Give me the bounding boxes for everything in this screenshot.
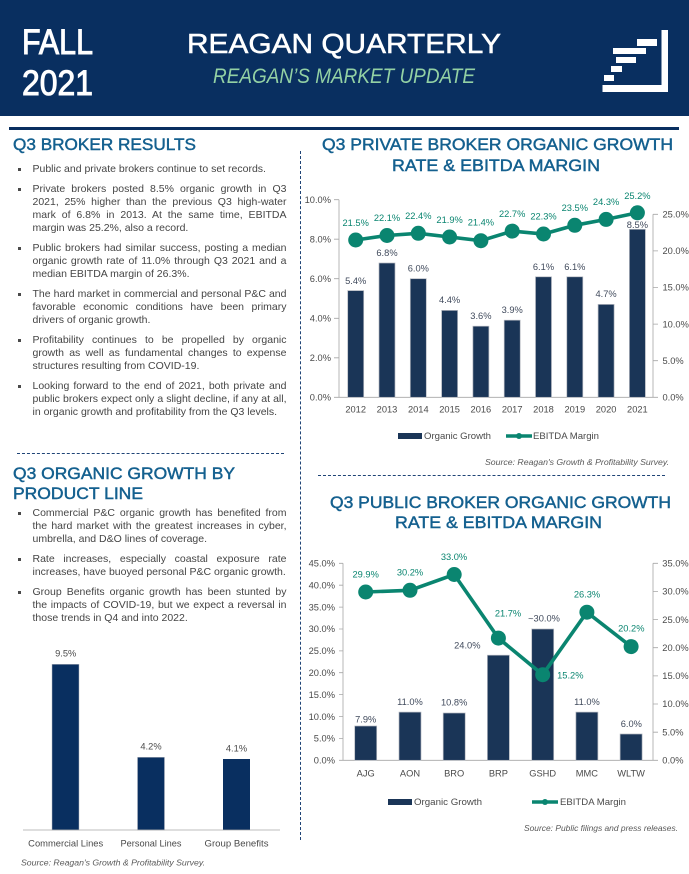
bullet: private brokers: 2021, 25% higher than the previous Q3 high-water xyxy=(32,196,286,208)
left axis labels: 8.0% xyxy=(310,234,331,244)
icon: staircase logo xyxy=(602,30,668,92)
EBITDA margin value labels: 29.9% xyxy=(353,570,379,580)
organic growth value labels: 6.0% xyxy=(408,264,429,274)
organic growth value labels: 6.8% xyxy=(376,248,398,258)
combo chart: public brokers xyxy=(308,552,689,833)
right axis labels: 25.0% xyxy=(662,615,689,625)
bullet: outlook: in organic growth and profitability from the Q3 levels. xyxy=(32,406,277,418)
bullet: records: Public and private brokers continue to set records. xyxy=(32,162,266,174)
left axis labels: 35.0% xyxy=(309,602,335,612)
legend: Organic Growth xyxy=(414,797,482,807)
source note: Source: Reagan's Growth & Profitability Survey. xyxy=(21,858,205,868)
EBITDA margin value labels: 21.4% xyxy=(468,218,494,228)
organic growth value labels: 3.9% xyxy=(502,305,523,315)
bullet: private brokers xyxy=(32,182,286,234)
heading: organic growth by product line: PRODUCT LINE xyxy=(13,484,143,503)
category labels: Group Benefits xyxy=(204,838,269,848)
right axis labels: 35.0% xyxy=(662,558,689,568)
organic growth value labels: 24.0% xyxy=(454,640,480,650)
right axis labels: 30.0% xyxy=(662,586,689,596)
bullet: public brokers: median EBITDA margin of 26.3%. xyxy=(32,268,190,280)
left axis labels: 5.0% xyxy=(314,734,335,744)
right axis labels: 10.0% xyxy=(662,320,689,330)
broker ticker labels: GSHD xyxy=(529,768,556,778)
EBITDA margin value labels: 15.2% xyxy=(557,670,583,680)
heading: private broker growth and margin: Q3 PRIVATE BROKER ORGANIC GROWTH xyxy=(322,135,673,154)
EBITDA margin value labels xyxy=(343,191,651,228)
bullet: commercial P&C: umbrella, and D&O lines of coverage. xyxy=(32,532,207,544)
bars: organic growth xyxy=(355,629,642,760)
bullet: profitability xyxy=(32,334,286,372)
EBITDA margin value labels: 20.2% xyxy=(618,624,644,634)
broker ticker labels: MMC xyxy=(576,768,598,778)
heading: public broker growth and margin: Q3 PUBLIC BROKER ORGANIC GROWTH xyxy=(330,493,671,512)
panel: Q3 public broker chart xyxy=(308,493,689,833)
legend: EBITDA Margin xyxy=(560,797,626,807)
EBITDA margin value labels: 25.2% xyxy=(624,191,651,201)
EBITDA margin value labels: 22.7% xyxy=(499,209,525,219)
legend: Organic Growth xyxy=(424,431,491,441)
organic growth value labels: ~30.0% xyxy=(528,614,560,624)
year labels: 2017 xyxy=(502,404,523,414)
bullet: hard market: favorable economic conditions have been primary xyxy=(32,300,286,312)
year labels: 2014 xyxy=(408,404,429,414)
bullet: profitability: growth as well as fundamental changes to expense xyxy=(32,346,286,358)
axes xyxy=(334,200,658,397)
bullet: group benefits: Group Benefits organic growth has been stunted by xyxy=(32,586,286,598)
organic growth value labels: 11.0% xyxy=(397,697,423,707)
broker ticker labels: AJG xyxy=(357,768,375,778)
line: EBITDA margin xyxy=(348,205,645,248)
panel: Q3 organic growth by product line xyxy=(13,464,286,868)
EBITDA margin value labels: 30.2% xyxy=(397,568,423,578)
organic growth value labels: 11.0% xyxy=(574,697,600,707)
bullet: group benefits xyxy=(32,586,286,624)
bullet: public brokers: Public brokers had similar success, posting a median xyxy=(32,242,286,254)
year labels: 2020 xyxy=(596,404,616,414)
left axis labels xyxy=(309,558,335,766)
source note: Source: Reagan's Growth & Profitability Survey. xyxy=(485,458,669,467)
right axis labels: 20.0% xyxy=(662,643,689,653)
broker ticker labels: WLTW xyxy=(617,768,645,778)
bars xyxy=(52,664,250,830)
bullet: hard market: drivers of organic growth. xyxy=(32,314,150,326)
left axis labels: 10.0% xyxy=(305,195,331,205)
value labels: 9.5% xyxy=(55,648,76,658)
bullet: private brokers: margin was 25.2%, also a record. xyxy=(32,222,188,234)
right axis labels: 10.0% xyxy=(662,699,689,709)
left axis labels: 40.0% xyxy=(309,580,335,590)
left axis labels: 15.0% xyxy=(309,690,335,700)
right axis labels xyxy=(662,210,689,402)
EBITDA margin value labels: 26.3% xyxy=(574,590,600,600)
bullet: outlook xyxy=(32,380,286,418)
heading: organic growth by product line: Q3 ORGANIC GROWTH BY xyxy=(13,464,235,483)
bullet: commercial P&C: Commercial P&C organic growth has benefited from xyxy=(32,506,286,518)
broker ticker labels: AON xyxy=(400,768,420,778)
bullet: profitability: Profitability continues to be propelled by organic xyxy=(32,334,286,346)
EBITDA margin value labels: 23.5% xyxy=(562,203,588,213)
heading: Q3 broker results: Q3 BROKER RESULTS xyxy=(13,135,196,154)
year labels: 2015 xyxy=(439,404,460,414)
EBITDA margin value labels xyxy=(353,552,644,680)
bullet: rate increases: Rate increases, especially coastal exposure rate xyxy=(32,552,286,564)
category labels: Commercial Lines xyxy=(28,838,104,848)
right axis labels: 0.0% xyxy=(662,392,684,402)
combo chart: private brokers xyxy=(305,191,689,467)
bullet: group benefits: those trends in Q4 and into 2022. xyxy=(32,612,188,624)
broker ticker labels: BRO xyxy=(444,768,464,778)
year labels: 2018 xyxy=(533,404,554,414)
title: REAGAN QUARTERLY xyxy=(187,28,501,59)
bullet: outlook: Looking forward to the end of 2021, both private and xyxy=(32,380,286,392)
value labels: 4.2% xyxy=(140,742,162,752)
season and year: FALL xyxy=(22,23,93,62)
left axis labels: 30.0% xyxy=(309,624,335,634)
right axis labels: 0.0% xyxy=(662,756,684,766)
organic growth value labels: 8.5% xyxy=(627,220,648,230)
EBITDA margin value labels: 21.7% xyxy=(495,608,521,618)
bullet: hard market xyxy=(32,288,286,326)
left axis labels: 6.0% xyxy=(310,274,331,284)
season and year xyxy=(22,23,93,103)
year labels: 2012 xyxy=(345,404,366,414)
bullet: rate increases xyxy=(32,552,286,578)
bar chart: product lines xyxy=(21,648,280,868)
source note: Source: Public filings and press releases. xyxy=(524,824,678,833)
heading: private broker growth and margin xyxy=(322,135,673,175)
heading: public broker growth and margin: RATE & EBITDA MARGIN xyxy=(395,513,602,532)
left axis labels: 45.0% xyxy=(309,558,335,568)
right axis labels: 5.0% xyxy=(662,356,684,366)
broker ticker labels xyxy=(357,768,645,778)
EBITDA margin value labels: 21.9% xyxy=(436,215,463,225)
legend xyxy=(388,797,626,807)
year labels: 2016 xyxy=(471,404,491,414)
organic growth value labels: 6.1% xyxy=(564,262,585,272)
organic growth value labels xyxy=(355,614,642,729)
left axis labels: 20.0% xyxy=(309,668,335,678)
organic growth value labels: 5.4% xyxy=(345,276,366,286)
bars: organic growth xyxy=(348,229,645,397)
left axis labels: 2.0% xyxy=(310,353,331,363)
organic growth value labels: 6.1% xyxy=(533,262,554,272)
left axis labels: 25.0% xyxy=(309,646,335,656)
panel: Q3 broker results xyxy=(13,135,286,418)
EBITDA margin value labels: 24.3% xyxy=(593,197,619,207)
bullet: rate increases: increases, have buoyed personal P&C organic growth. xyxy=(32,566,286,578)
bullet: group benefits: the impacts of COVID-19, but we expect a reversal in xyxy=(32,598,286,610)
legend xyxy=(398,431,599,441)
organic growth value labels: 6.0% xyxy=(621,719,642,729)
category labels: Personal Lines xyxy=(120,838,182,848)
heading: organic growth by product line xyxy=(13,464,235,503)
year labels: 2013 xyxy=(377,404,397,414)
bullet: profitability: structures resulting from COVID-19. xyxy=(32,360,199,372)
panel: Q3 private broker chart xyxy=(305,135,689,467)
bullet: public brokers: organic growth rate of 11.0% through Q3 2021 and a xyxy=(32,254,286,266)
subtitle: REAGAN’S MARKET UPDATE xyxy=(213,65,476,88)
EBITDA margin value labels: 22.1% xyxy=(374,213,400,223)
organic growth value labels: 4.7% xyxy=(595,289,617,299)
legend: EBITDA Margin xyxy=(533,431,599,441)
bullet: commercial P&C xyxy=(32,506,286,546)
bullet: commercial P&C: the hard market with the greatest increases in cyber, xyxy=(32,520,286,532)
left axis labels: 4.0% xyxy=(310,314,331,324)
heading: public broker growth and margin xyxy=(330,493,671,532)
right axis labels: 25.0% xyxy=(662,210,689,220)
year labels: 2019 xyxy=(564,404,585,414)
right axis labels: 15.0% xyxy=(662,282,689,292)
EBITDA margin value labels: 21.5% xyxy=(343,218,369,228)
bullet: outlook: public brokers expect only a slight decline, if any at all, xyxy=(32,392,286,404)
bullet: hard market: The hard market in commercial and personal P&C and xyxy=(32,288,286,300)
heading: private broker growth and margin: RATE & EBITDA MARGIN xyxy=(392,156,600,175)
organic growth value labels: 7.9% xyxy=(355,714,376,724)
EBITDA margin value labels: 22.4% xyxy=(405,211,431,221)
left axis labels: 10.0% xyxy=(309,712,335,722)
header banner xyxy=(0,0,689,116)
value labels xyxy=(55,648,247,754)
right axis labels: 15.0% xyxy=(662,671,689,681)
category labels xyxy=(28,838,269,848)
line: EBITDA margin xyxy=(358,567,639,682)
organic growth value labels: 3.6% xyxy=(470,311,492,321)
left axis labels: 0.0% xyxy=(314,756,335,766)
broker ticker labels: BRP xyxy=(489,768,508,778)
left axis labels xyxy=(305,195,331,402)
bullet: public brokers xyxy=(32,242,286,280)
organic growth value labels: 4.4% xyxy=(439,295,460,305)
right axis labels: 20.0% xyxy=(662,246,689,256)
EBITDA margin value labels: 33.0% xyxy=(441,552,467,562)
year labels: 2021 xyxy=(627,404,648,414)
bullet: private brokers: mark of 6.8% in 2013. At the same time, EBITDA xyxy=(32,208,286,220)
axes xyxy=(339,563,658,760)
bullet: private brokers: Private brokers posted 8.5% organic growth in Q3 xyxy=(32,182,286,194)
season and year: 2021 xyxy=(22,64,93,103)
organic growth value labels: 10.8% xyxy=(441,698,467,708)
organic growth value labels xyxy=(345,220,648,321)
left axis labels: 0.0% xyxy=(310,392,331,402)
value labels: 4.1% xyxy=(226,744,247,754)
EBITDA margin value labels: 22.3% xyxy=(530,212,557,222)
right axis labels xyxy=(662,558,689,766)
right axis labels: 5.0% xyxy=(662,728,684,738)
year labels xyxy=(345,404,648,414)
